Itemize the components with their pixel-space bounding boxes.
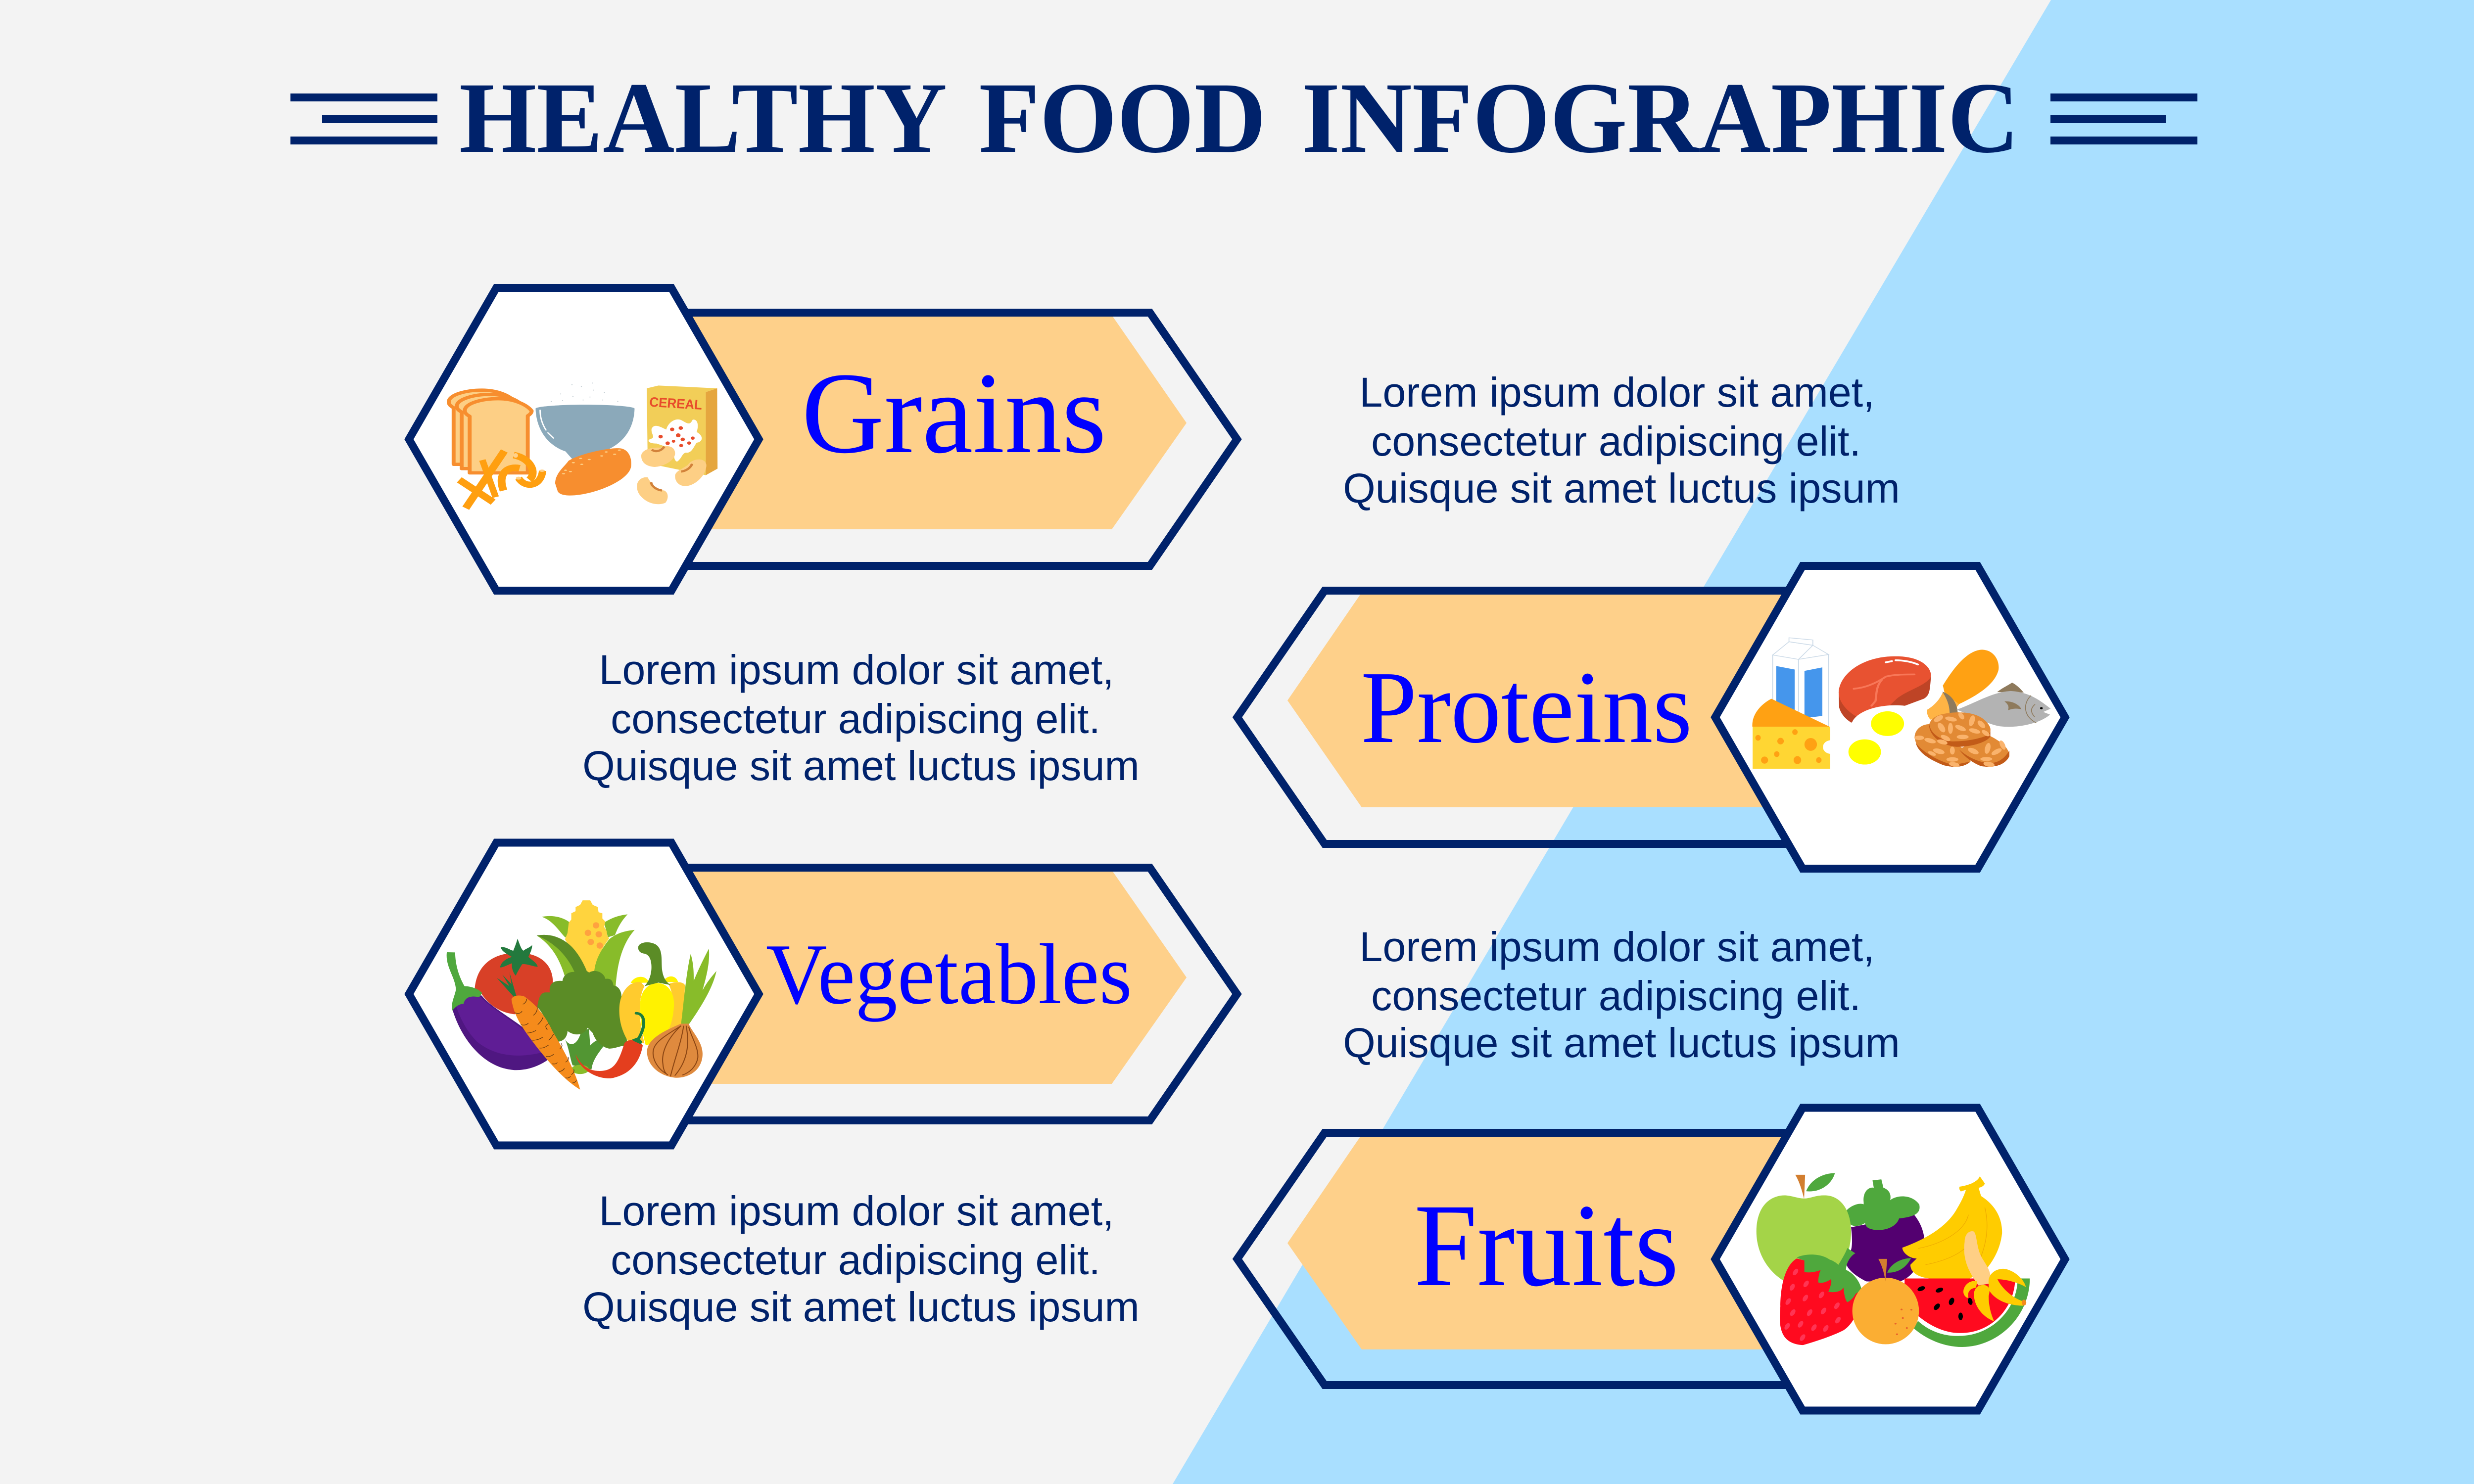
text block: grains [1343, 369, 1900, 511]
icon: almond cookies [1915, 724, 1971, 767]
proteins hexagon [1715, 566, 2065, 869]
proteins banner fill [1287, 595, 1930, 807]
vegetables banner fill [643, 872, 1187, 1084]
icon: peeled banana [1964, 1231, 1991, 1286]
icon: bowl [535, 405, 635, 459]
text block: vegetables: Quisque sit amet luctus ipsum [1343, 1020, 1900, 1066]
icon: broccoli [565, 1029, 604, 1069]
icon: cereal box [647, 385, 717, 475]
icon: apple [1757, 1195, 1851, 1280]
icon: meat [1839, 677, 1931, 723]
title [290, 62, 2197, 174]
text block: grains: consectetur adipiscing elit. [1371, 418, 1861, 464]
fruits hexagon [1715, 1108, 2065, 1411]
panel: vegetables [409, 843, 1237, 1146]
text block: fruits: consectetur adipiscing elit. [611, 1237, 1100, 1283]
proteins label: Proteins [1361, 650, 1692, 765]
title bars: right [2050, 93, 2197, 144]
icon: rice specks [551, 382, 618, 402]
icon: fruits [1757, 1173, 2030, 1347]
text block: vegetables: consectetur adipiscing elit. [1371, 973, 1861, 1019]
icon: beans [637, 446, 707, 504]
text block: fruits [582, 1188, 1140, 1330]
icon: mangosteen [1846, 1215, 1925, 1282]
icon: yellow pepper [630, 976, 678, 983]
icon: watermelon [1904, 1278, 2015, 1333]
icon: milk carton [1773, 638, 1829, 728]
icon: cheese [1752, 698, 1830, 727]
title bars: left [290, 93, 437, 144]
grains hexagon [409, 288, 759, 591]
icon: vegetables [447, 900, 716, 1090]
vegetables label: Vegetables [766, 926, 1132, 1022]
grains banner outline [643, 313, 1237, 566]
background: blue diagonal panel [1173, 0, 2474, 1484]
icon: chicken leg [1943, 649, 1998, 705]
text block: proteins: Lorem ipsum dolor sit amet, [599, 647, 1114, 693]
icon: bread slices [449, 390, 532, 473]
icon: chili [575, 1040, 643, 1078]
icon: strawberry [1780, 1258, 1861, 1345]
proteins banner outline [1237, 591, 1930, 844]
panel: grains [409, 288, 1237, 591]
panel: fruits [1237, 1108, 2065, 1411]
fruits banner outline [1237, 1133, 1930, 1385]
vegetables banner outline [643, 868, 1237, 1120]
text block: grains: Lorem ipsum dolor sit amet, [1359, 369, 1875, 416]
icon: protein foods [1752, 638, 2050, 769]
fruits banner fill [1287, 1137, 1930, 1349]
icon: bananas [1903, 1176, 2002, 1278]
text block: proteins: Quisque sit amet luctus ipsum [582, 742, 1140, 789]
icon: tomato [475, 953, 553, 1014]
icon: grains foods [449, 382, 717, 508]
text block: grains: Quisque sit amet luctus ipsum [1343, 465, 1900, 511]
text block: proteins: consectetur adipiscing elit. [611, 696, 1100, 742]
icon: eggs [1852, 705, 1913, 730]
icon: macaroni [459, 451, 545, 508]
text block: vegetables: Lorem ipsum dolor sit amet, [1359, 924, 1875, 970]
icon: orange [1853, 1278, 1919, 1345]
icon: corn and husks [542, 916, 570, 939]
cereal box label: CEREAL [649, 395, 703, 413]
icon: eggplant [453, 995, 550, 1070]
title text: HEALTHY FOOD INFOGRAPHIC [459, 62, 2019, 174]
text block: proteins [582, 647, 1140, 789]
icon: onion [681, 949, 716, 1024]
text block: vegetables [1343, 924, 1900, 1066]
vegetables hexagon [409, 843, 759, 1146]
panel: proteins [1237, 566, 2065, 869]
icon: bread loaf [555, 448, 631, 496]
grains label: Grains [802, 349, 1106, 477]
icon: fish [1997, 683, 2024, 693]
grains banner fill [643, 317, 1187, 529]
fruits label: Fruits [1414, 1179, 1679, 1311]
text block: fruits: Quisque sit amet luctus ipsum [582, 1284, 1140, 1330]
icon: carrot [497, 972, 518, 1000]
text block: fruits: Lorem ipsum dolor sit amet, [599, 1188, 1114, 1234]
